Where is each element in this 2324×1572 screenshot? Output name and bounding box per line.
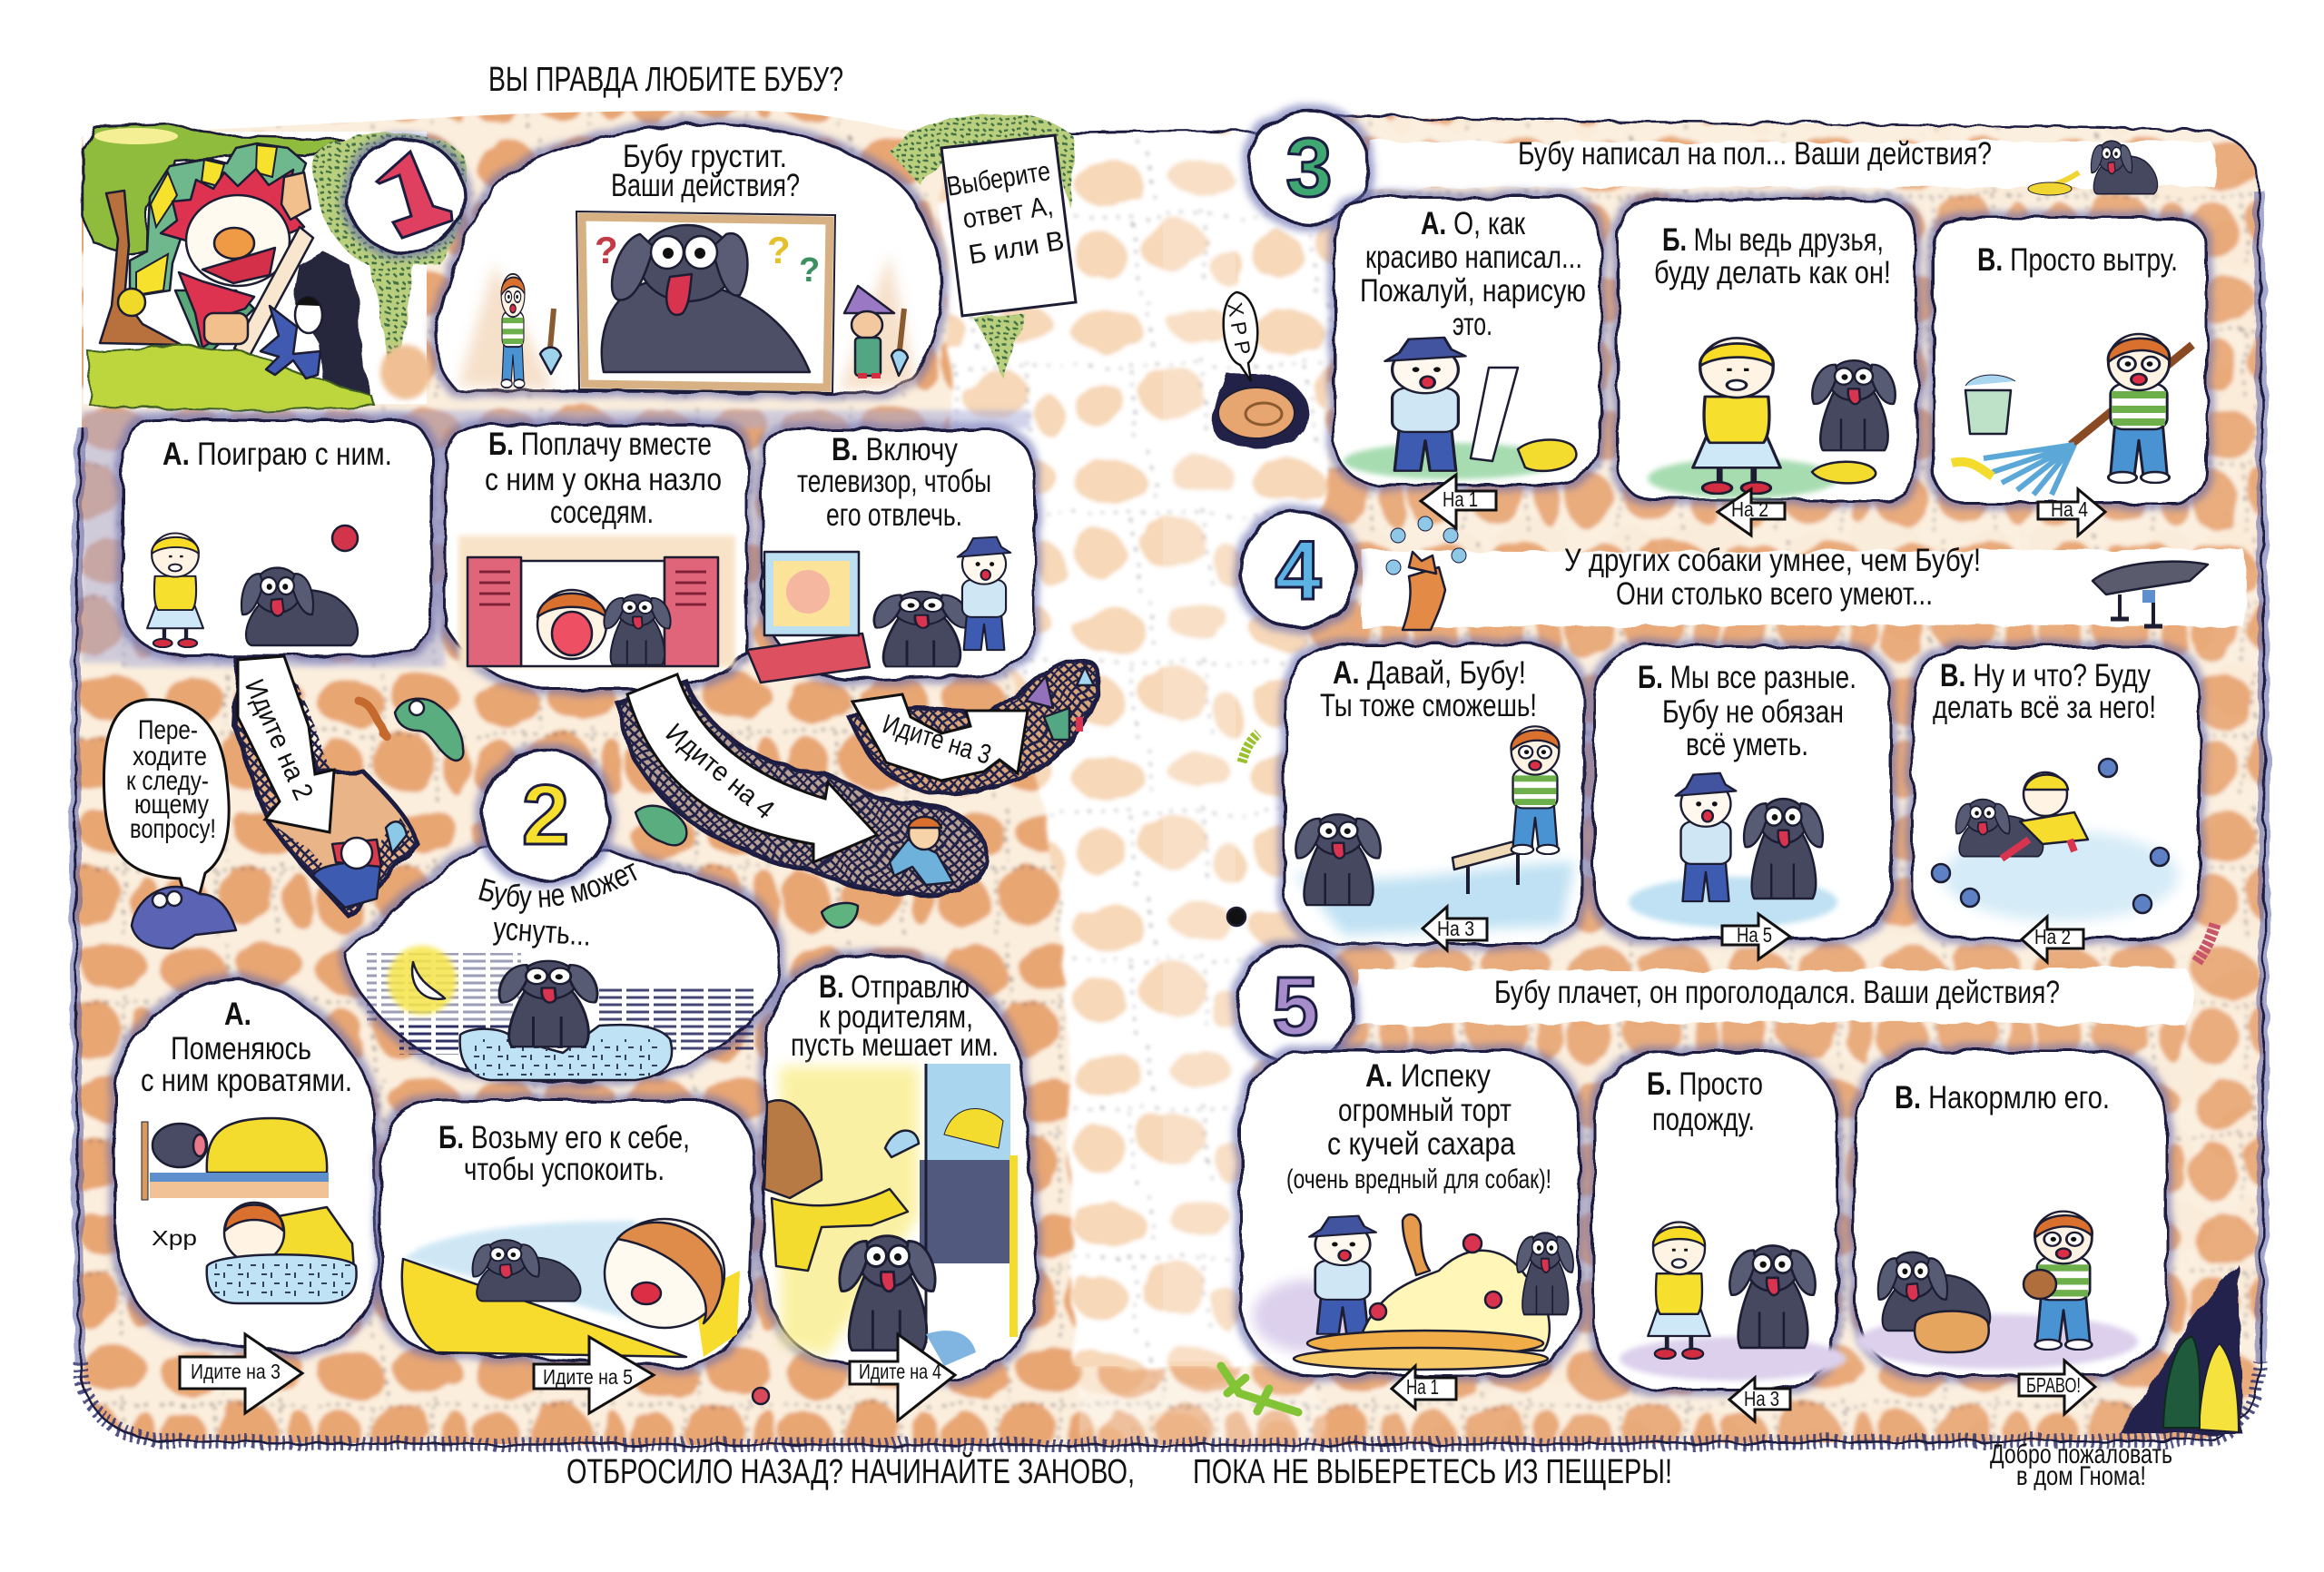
window scene — [458, 535, 735, 667]
arrow: to 3: На 3 — [1744, 1387, 1779, 1410]
arrow: to 2 — [1718, 489, 1785, 535]
cake scene — [1253, 1214, 1573, 1370]
heading: Бубу грустит. — [623, 139, 787, 174]
arrow: to 1 — [1392, 1366, 1456, 1409]
answer text: телевизор, чтобы — [797, 464, 991, 499]
icon: dog peeing — [2028, 141, 2158, 195]
badge: number 5 — [1237, 947, 1354, 1063]
arrow: bravo — [2019, 1361, 2095, 1414]
answer text: В. Накормлю его. — [1895, 1080, 2110, 1115]
speech bubble: next question: Пере- — [138, 715, 198, 745]
panel: question 1 cave — [435, 124, 941, 393]
answer text: Пожалуй, нарисую — [1360, 273, 1586, 309]
sign: choose answer — [941, 135, 1076, 316]
icon: small frog — [822, 903, 858, 928]
icon: tree — [82, 124, 342, 345]
panel: 5A cake — [1241, 1051, 1579, 1375]
figure: gnome — [844, 286, 894, 376]
badge: number 2: 2 — [522, 767, 569, 862]
answer text: всё уметь. — [1686, 727, 1808, 762]
speech bubble: next question: ходите — [133, 742, 207, 771]
panel: 4V do everything — [1913, 646, 2200, 938]
heading: уснуть... — [492, 910, 592, 953]
icon: dog jumping hurdle — [2093, 562, 2208, 626]
arrow: go to 5 (2B): Идите на 5 — [543, 1365, 633, 1389]
figure: girl — [147, 533, 203, 647]
badge: number 3 — [1249, 111, 1369, 223]
picture frame with sad dog: ? — [767, 229, 791, 271]
answer text: огромный торт — [1338, 1093, 1512, 1128]
picture frame with sad dog: ? — [595, 229, 618, 271]
sign: choose answer: Б или В — [967, 226, 1066, 270]
icon: exit to gnome house — [2121, 1264, 2242, 1433]
icon: green lizard — [395, 699, 463, 761]
figure: boy in dog basket — [207, 1203, 357, 1303]
figure: dog — [874, 592, 969, 666]
answer text: Поменяюсь — [171, 1031, 311, 1066]
answer text — [1360, 206, 1586, 342]
answer text: с кучей сахара — [1327, 1126, 1515, 1162]
heading: Они столько всего умеют... — [1616, 576, 1933, 612]
night scene with moon — [367, 946, 753, 1080]
heading — [611, 139, 800, 203]
badge: number 3: 3 — [1285, 122, 1333, 214]
figure: boy — [501, 274, 525, 388]
icon: vine around badge — [313, 133, 467, 399]
arrow: bravo: БРАВО! — [2026, 1373, 2081, 1397]
arrow: to 5 — [1722, 914, 1790, 959]
band: question 5 — [1356, 968, 2192, 1026]
figure: dog jumping — [241, 568, 358, 645]
arrow: go to 2: Идите на 2 — [239, 674, 319, 805]
answer text: (очень вредный для собак)! — [1286, 1164, 1551, 1194]
arrow: back to 1 — [1421, 475, 1496, 528]
heading: Ваши действия? — [611, 168, 800, 203]
answer text: к родителям, — [819, 999, 973, 1035]
icon: juggling cat — [1386, 516, 1466, 630]
hurdle scene — [1294, 726, 1575, 935]
speech bubble: next question: вопросу! — [130, 814, 216, 844]
badge: number 4 — [1240, 512, 1356, 628]
answer text — [141, 997, 352, 1098]
hat — [130, 143, 306, 297]
body — [175, 290, 254, 351]
caption: welcome to gnome house — [1990, 1439, 2172, 1491]
arrow: to 3: На 3 — [1437, 917, 1474, 940]
picture frame with sad dog: ? — [799, 251, 820, 290]
arrow: to 4 — [2038, 489, 2105, 535]
heading: Бубу написал на пол... Ваши действия? — [1518, 136, 1992, 172]
collar crown — [161, 169, 304, 241]
answer text: с ним у окна назло — [485, 462, 722, 497]
figure: man sliding — [313, 821, 407, 908]
answer text: А. — [224, 997, 251, 1032]
icon: ladybug — [753, 1388, 769, 1404]
answer text: чтобы успокоить. — [464, 1152, 665, 1187]
feeding scene — [1856, 1212, 2138, 1369]
stick arm — [234, 227, 313, 356]
icon: snoring hedgehog: ХРР — [1223, 300, 1256, 357]
answer text — [1647, 1066, 1763, 1137]
arrow: go to 4: Идите на 4 — [660, 718, 780, 825]
speech bubble: next question: к следу- — [126, 766, 209, 796]
answer text — [1638, 660, 1856, 762]
icon: television — [747, 552, 870, 683]
panel: 2V send to parents — [762, 956, 1038, 1381]
picture frame with sad dog — [576, 211, 835, 393]
answer text: соседям. — [550, 495, 654, 530]
badge: number 2 — [482, 750, 609, 880]
tunnel to 2 — [234, 660, 418, 917]
speech bubble: snore — [1224, 292, 1257, 381]
arrow: to 2: На 2 — [1731, 497, 1768, 521]
answer text: Б. Мы ведь друзья, — [1662, 222, 1884, 258]
icon: mole — [132, 887, 236, 948]
panel: 4A encourage — [1285, 644, 1582, 944]
snore label: Хрр — [152, 1226, 197, 1250]
panel: question 2 cloud — [334, 838, 790, 1093]
panel: 2A swap beds — [115, 978, 378, 1352]
answer text: Ты тоже сможешь! — [1320, 688, 1537, 723]
icon: worm — [359, 701, 387, 737]
answer text — [438, 1120, 690, 1187]
badge: number 5: 5 — [1272, 960, 1319, 1053]
answer text — [485, 427, 722, 530]
arrow: go to 4 — [627, 674, 877, 862]
answer text: делать всё за него! — [1933, 690, 2156, 725]
bottom text: left: ОТБРОСИЛО НАЗАД? НАЧИНАЙТЕ ЗАНОВО, — [566, 1450, 1135, 1491]
heading — [1564, 543, 1981, 612]
panel: 3V wipe — [1934, 218, 2207, 503]
icon: ball — [332, 526, 358, 551]
answer text: А. Давай, Бубу! — [1333, 655, 1526, 691]
arrow: to 1: На 1 — [1406, 1375, 1439, 1399]
speech bubble: next question — [103, 700, 229, 921]
figure: man — [958, 537, 1010, 650]
answer text: Б. Мы все разные. — [1638, 660, 1856, 695]
icon: snoring hedgehog — [1213, 292, 1307, 447]
painter scene — [1344, 338, 1576, 479]
badge: number 4: 4 — [1275, 525, 1322, 617]
answer text: В. Просто вытру. — [1977, 242, 2178, 278]
heading: Бубу не может — [478, 862, 637, 914]
answer text: с ним кроватями. — [141, 1063, 352, 1098]
icon: green lizard — [1221, 1366, 1298, 1412]
badge: number 1 — [348, 140, 464, 252]
lilac shading on the stones around the first row — [82, 410, 1030, 667]
arrow: go to 3 (2A): Идите на 3 — [191, 1360, 281, 1383]
answer text: пусть мешает им. — [791, 1027, 999, 1063]
panel: 3A draw it — [1334, 197, 1600, 485]
boy mopping scene — [1952, 334, 2192, 495]
icon: pink centipede — [2197, 924, 2215, 962]
arrow: to 4: На 4 — [2051, 497, 2088, 521]
arrow: to 3 — [1423, 907, 1487, 950]
panel: 1B cry at window — [446, 425, 747, 690]
figure: small man in coat — [261, 297, 322, 378]
arrow: go to 4 (2V) — [850, 1334, 955, 1420]
answer text — [791, 969, 999, 1063]
heading: У других собаки умнее, чем Бубу! — [1564, 543, 1981, 578]
answer text: В. Ну и что? Буду — [1940, 658, 2151, 693]
icon: hanging vine — [888, 113, 1074, 378]
arrow: to 5: На 5 — [1737, 923, 1772, 947]
caption: welcome to gnome house: Добро пожаловать — [1990, 1439, 2172, 1469]
speech bubble: next question: ющему — [134, 790, 209, 820]
balls scene — [1932, 759, 2179, 921]
arrow: to 2: На 2 — [2034, 925, 2071, 948]
answer text: Б. Поплачу вместе — [488, 427, 712, 462]
sign: choose answer: ответ А, — [960, 191, 1055, 234]
tunnel to 4 — [617, 681, 987, 896]
icon: grass — [88, 345, 375, 411]
answer text: А. Испеку — [1365, 1058, 1491, 1094]
answer text — [1654, 222, 1891, 290]
answer text: Б. Возьму его к себе, — [438, 1120, 690, 1155]
bottom text: right: ПОКА НЕ ВЫБЕРЕТЕСЬ ИЗ ПЕЩЕРЫ! — [1193, 1453, 1672, 1491]
white sky behind jester — [84, 132, 427, 404]
man hugging dog scene — [1629, 773, 1837, 928]
icon: shovels — [540, 309, 908, 376]
door scene — [764, 1064, 1018, 1366]
arrow: go to 5 (2B) — [534, 1337, 654, 1413]
icon: bed with dog — [142, 1118, 329, 1200]
answer text — [1286, 1058, 1551, 1194]
girl and dog scene — [1648, 338, 1896, 498]
title: ВЫ ПРАВДА ЛЮБИТЕ БУБУ? — [488, 61, 843, 99]
answer text: В. Отправлю — [819, 969, 970, 1005]
arrow: to 3 — [1729, 1378, 1790, 1421]
figures in tunnel — [1026, 667, 1094, 740]
scene: forest entrance with jester — [82, 124, 467, 411]
arrow: go to 2 — [238, 656, 334, 832]
answer text: красиво написал... — [1365, 240, 1582, 275]
arrow: go to 3 — [852, 694, 1028, 781]
icon: cave door — [293, 252, 372, 399]
answer text: подожду. — [1652, 1102, 1755, 1137]
answer text — [797, 432, 991, 533]
panel: 5V feed — [1855, 1051, 2167, 1375]
answer text: его отвлечь. — [826, 497, 962, 533]
arrow: go to 3: Идите на 3 — [879, 709, 995, 771]
icon: green beetle — [635, 806, 686, 845]
arrow: go to 4 (2V): Идите на 4 — [859, 1360, 941, 1383]
answer text: это. — [1452, 307, 1492, 342]
icon: jester — [118, 143, 313, 356]
floor shading — [458, 254, 917, 390]
panel: 1V television — [747, 429, 1035, 683]
tunnel to 3 — [849, 659, 1099, 794]
icon: black spider — [1227, 908, 1246, 926]
heading — [478, 862, 637, 953]
icon: centipede — [1242, 733, 1258, 762]
answer text: А. Поиграю с ним. — [162, 437, 392, 472]
caption: welcome to gnome house: в дом Гнома! — [2016, 1461, 2146, 1491]
answer text: Б. Просто — [1647, 1066, 1763, 1102]
figure: boy in tunnel — [890, 817, 953, 885]
panel: 3B copy — [1618, 200, 1916, 500]
girl and dog scene — [1620, 1223, 1846, 1380]
band: question 4 — [1362, 516, 2246, 630]
answer text: В. Включу — [832, 432, 958, 467]
panel: 4B all different — [1593, 646, 1891, 938]
answer text — [1320, 655, 1537, 723]
arrow: back to 1: На 1 — [1443, 487, 1478, 511]
band: question 3 — [1362, 136, 2218, 195]
heading: Бубу плачет, он проголодался. Ваши действия? — [1494, 975, 2060, 1010]
panel: 5B wait — [1593, 1053, 1846, 1390]
answer text: буду делать как он! — [1654, 255, 1891, 290]
arrow: go to 3 (2A) — [180, 1334, 302, 1413]
answer text: Бубу не обязан — [1662, 694, 1844, 730]
bed scene — [402, 1219, 740, 1357]
answer text — [1933, 658, 2156, 725]
sign: choose answer: Выберите — [945, 156, 1052, 202]
panel: 1A play — [123, 420, 431, 656]
arrow: to 2 — [2022, 917, 2083, 962]
answer text: А. О, как — [1421, 206, 1526, 241]
panel: 2B take to bed — [381, 1101, 754, 1367]
